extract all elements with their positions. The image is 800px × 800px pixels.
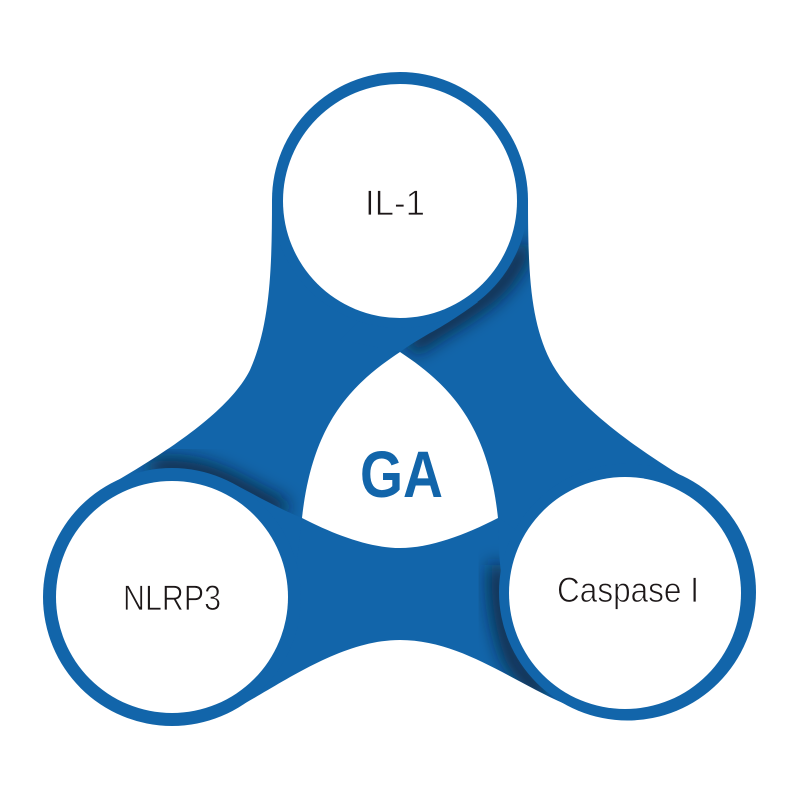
circle: IL-1: IL-1 (365, 184, 425, 223)
centre: GA: GA (360, 437, 443, 511)
right circle tail (499, 518, 560, 580)
shadows (150, 245, 545, 695)
circle: IL-1 (272, 72, 528, 328)
diagram (43, 72, 756, 726)
circle: Caspase I: Caspase I (557, 571, 699, 610)
circle: NLRP3: NLRP3 (123, 579, 221, 618)
circle: NLRP3 (43, 468, 301, 726)
centre: GA (302, 352, 498, 548)
circle: Caspase I (499, 464, 756, 720)
blue trefoil body (113, 200, 685, 707)
left circle tail (200, 482, 302, 620)
top circle tail (340, 280, 478, 352)
